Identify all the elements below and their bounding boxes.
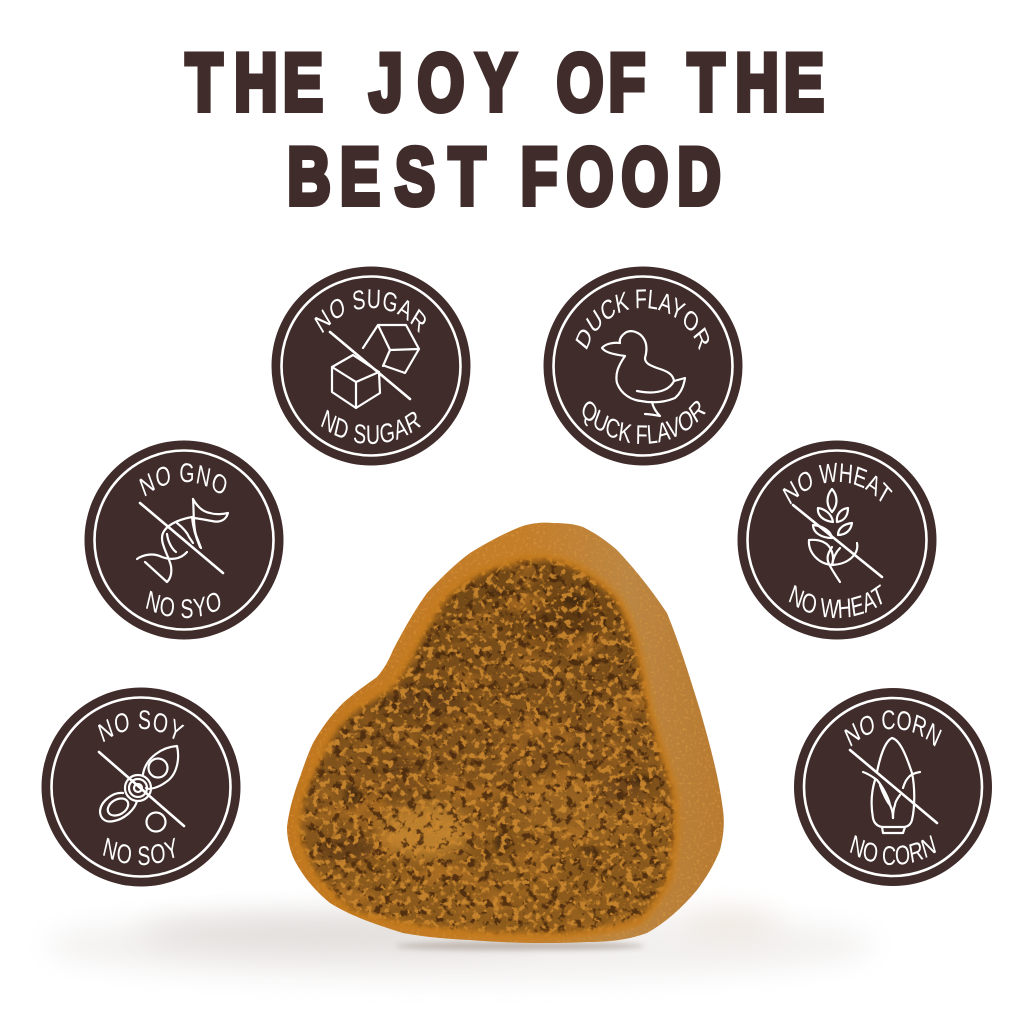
badge: no wheat <box>738 440 936 640</box>
label: no syo bottom: NO SYO <box>146 590 220 618</box>
kibble outer crust <box>287 523 724 943</box>
icon: dna helix crossed <box>137 499 228 582</box>
badge: no gmo <box>84 440 284 640</box>
label: no soy bottom: NO SOY <box>103 838 175 866</box>
label: no wheat top: NO WHEAT <box>782 462 892 504</box>
icon: corn crossed <box>850 738 937 833</box>
icon: sugar cubes crossed <box>330 325 419 408</box>
kibble: cut-open heart-shaped treat <box>280 515 730 950</box>
kibble inner orange edge <box>300 560 673 933</box>
badge: duck flavor <box>544 266 742 466</box>
badge: no corn <box>794 688 992 886</box>
label: nd sugar bottom: ND SUGAR <box>321 410 421 444</box>
title line 1: THEJOYOFTHE <box>186 37 824 128</box>
title line 2: BESTFOOD <box>287 131 721 222</box>
icon: wheat crossed <box>793 489 882 582</box>
label: no corn bottom: NO CORN <box>850 835 936 866</box>
title <box>186 37 824 222</box>
label: no gno top: NO GNO <box>139 463 226 496</box>
icon: soybeans crossed <box>99 746 184 832</box>
ground shadow <box>45 911 875 979</box>
label: duck flayor top: DUCK FLAYOR <box>576 289 710 350</box>
label: no soy top: NO SOY <box>98 710 184 742</box>
icon: duck <box>602 331 685 416</box>
label: quck flavor bottom: QUCK FLAVOR <box>582 400 706 444</box>
kibble crust speckle <box>280 515 730 950</box>
label: no wheat bottom: NO WHEAT <box>788 584 882 618</box>
label: no corn top: NO CORN <box>844 710 942 746</box>
badge: no sugar <box>272 266 470 466</box>
label: no sugar top: NO SUGAR <box>314 289 426 334</box>
badge: no soy <box>42 688 240 886</box>
kibble crumb interior <box>290 555 680 940</box>
